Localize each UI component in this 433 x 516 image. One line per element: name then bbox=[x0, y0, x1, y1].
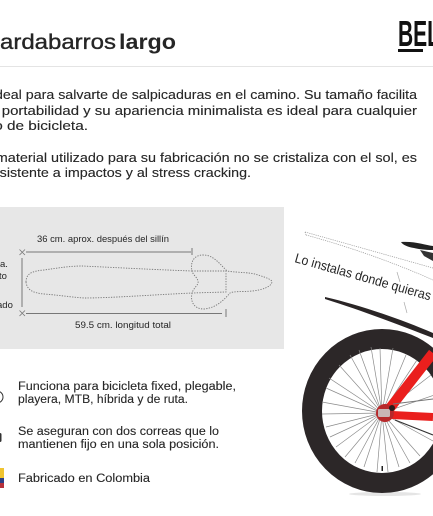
description paragraph 1: Ideal para salvarte de salpicaduras en el camino. Su tamaño facilita bbox=[0, 87, 418, 102]
black fender bbox=[325, 297, 433, 338]
feature: compatibility bbox=[18, 381, 236, 406]
icon: bike type bbox=[0, 391, 3, 403]
saddle bbox=[401, 242, 433, 261]
panel: dimensions diagram bbox=[0, 207, 284, 349]
wheel shadow bbox=[349, 492, 421, 496]
icon: strap bbox=[0, 433, 2, 442]
fender outline bbox=[26, 255, 272, 309]
dimension lines bbox=[20, 248, 226, 317]
feature: straps bbox=[18, 426, 219, 451]
label: clipped width note: a. bbox=[0, 259, 8, 270]
bike illustration bbox=[293, 232, 433, 496]
feature: straps: Se aseguran con dos correas que lo bbox=[18, 426, 219, 438]
divider bbox=[0, 66, 433, 67]
label: total length: 59.5 cm. longitud total bbox=[75, 320, 171, 331]
label: length after saddle: 36 cm. aprox. después del sillín bbox=[37, 234, 169, 245]
feature: origin: Fabricado en Colombia bbox=[18, 473, 151, 485]
label: clipped width note bbox=[0, 259, 13, 311]
feature: compatibility: playera, MTB, híbrida y de ruta. bbox=[18, 394, 188, 406]
valve bbox=[382, 466, 383, 471]
hub bbox=[376, 404, 395, 422]
pointer lines bbox=[397, 272, 407, 313]
feature: compatibility: Funciona para bicicleta fixed, plegable, bbox=[18, 381, 236, 393]
wheel bbox=[312, 339, 433, 483]
feature list bbox=[18, 381, 236, 485]
title bbox=[0, 31, 176, 54]
icon: Colombia flag bbox=[0, 468, 4, 488]
title: largo bbox=[119, 31, 176, 54]
title: ardabarros bbox=[0, 31, 116, 54]
description paragraph 2 bbox=[0, 150, 418, 180]
red frame bbox=[376, 353, 433, 435]
description paragraph 1 bbox=[0, 87, 418, 133]
feature: straps: mantienen fijo en una sola posición. bbox=[18, 439, 219, 451]
dotted fender position bbox=[305, 232, 433, 280]
spokes bbox=[322, 347, 433, 472]
